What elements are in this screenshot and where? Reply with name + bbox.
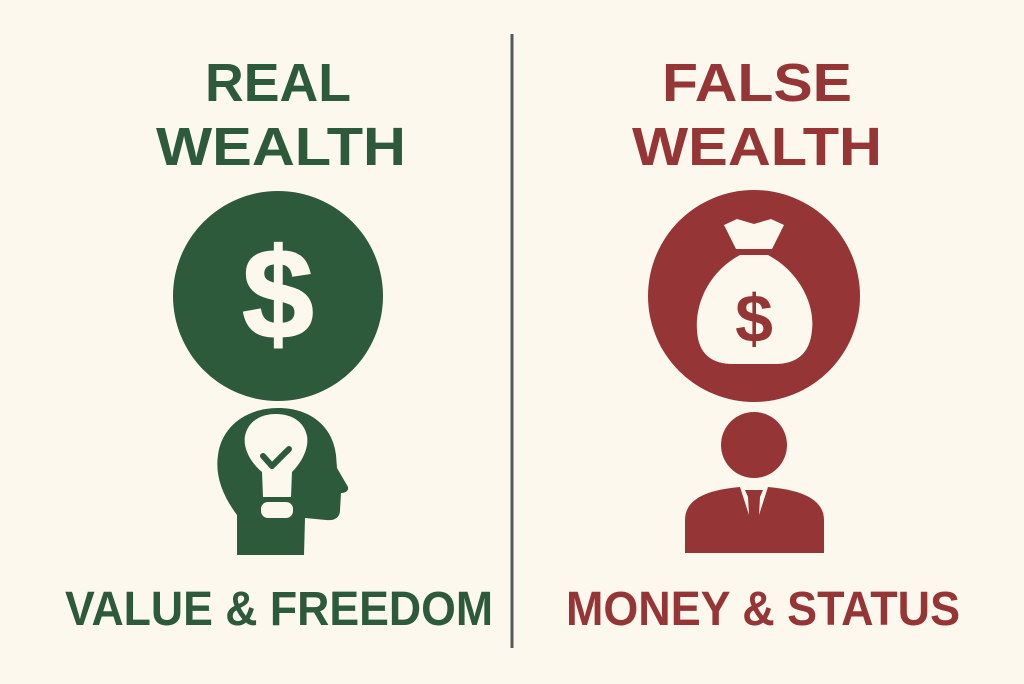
- icon: money bag circle: $: [735, 281, 773, 357]
- icon: head with lightbulb: [217, 408, 348, 555]
- label: money & status: MONEY & STATUS: [566, 583, 960, 636]
- title: false wealth: FALSE: [662, 53, 852, 113]
- title: real wealth: REAL: [205, 53, 351, 113]
- label: value & freedom: VALUE & FREEDOM: [65, 583, 493, 636]
- title: false wealth: [632, 53, 882, 177]
- icon: dollar circle: $: [242, 223, 314, 366]
- title: real wealth: [156, 53, 406, 177]
- icon: dollar circle: [173, 191, 383, 401]
- icon: money bag circle: [648, 190, 860, 402]
- title: false wealth: WEALTH: [632, 117, 882, 177]
- icon: businessman: [685, 412, 824, 553]
- title: real wealth: WEALTH: [156, 117, 406, 177]
